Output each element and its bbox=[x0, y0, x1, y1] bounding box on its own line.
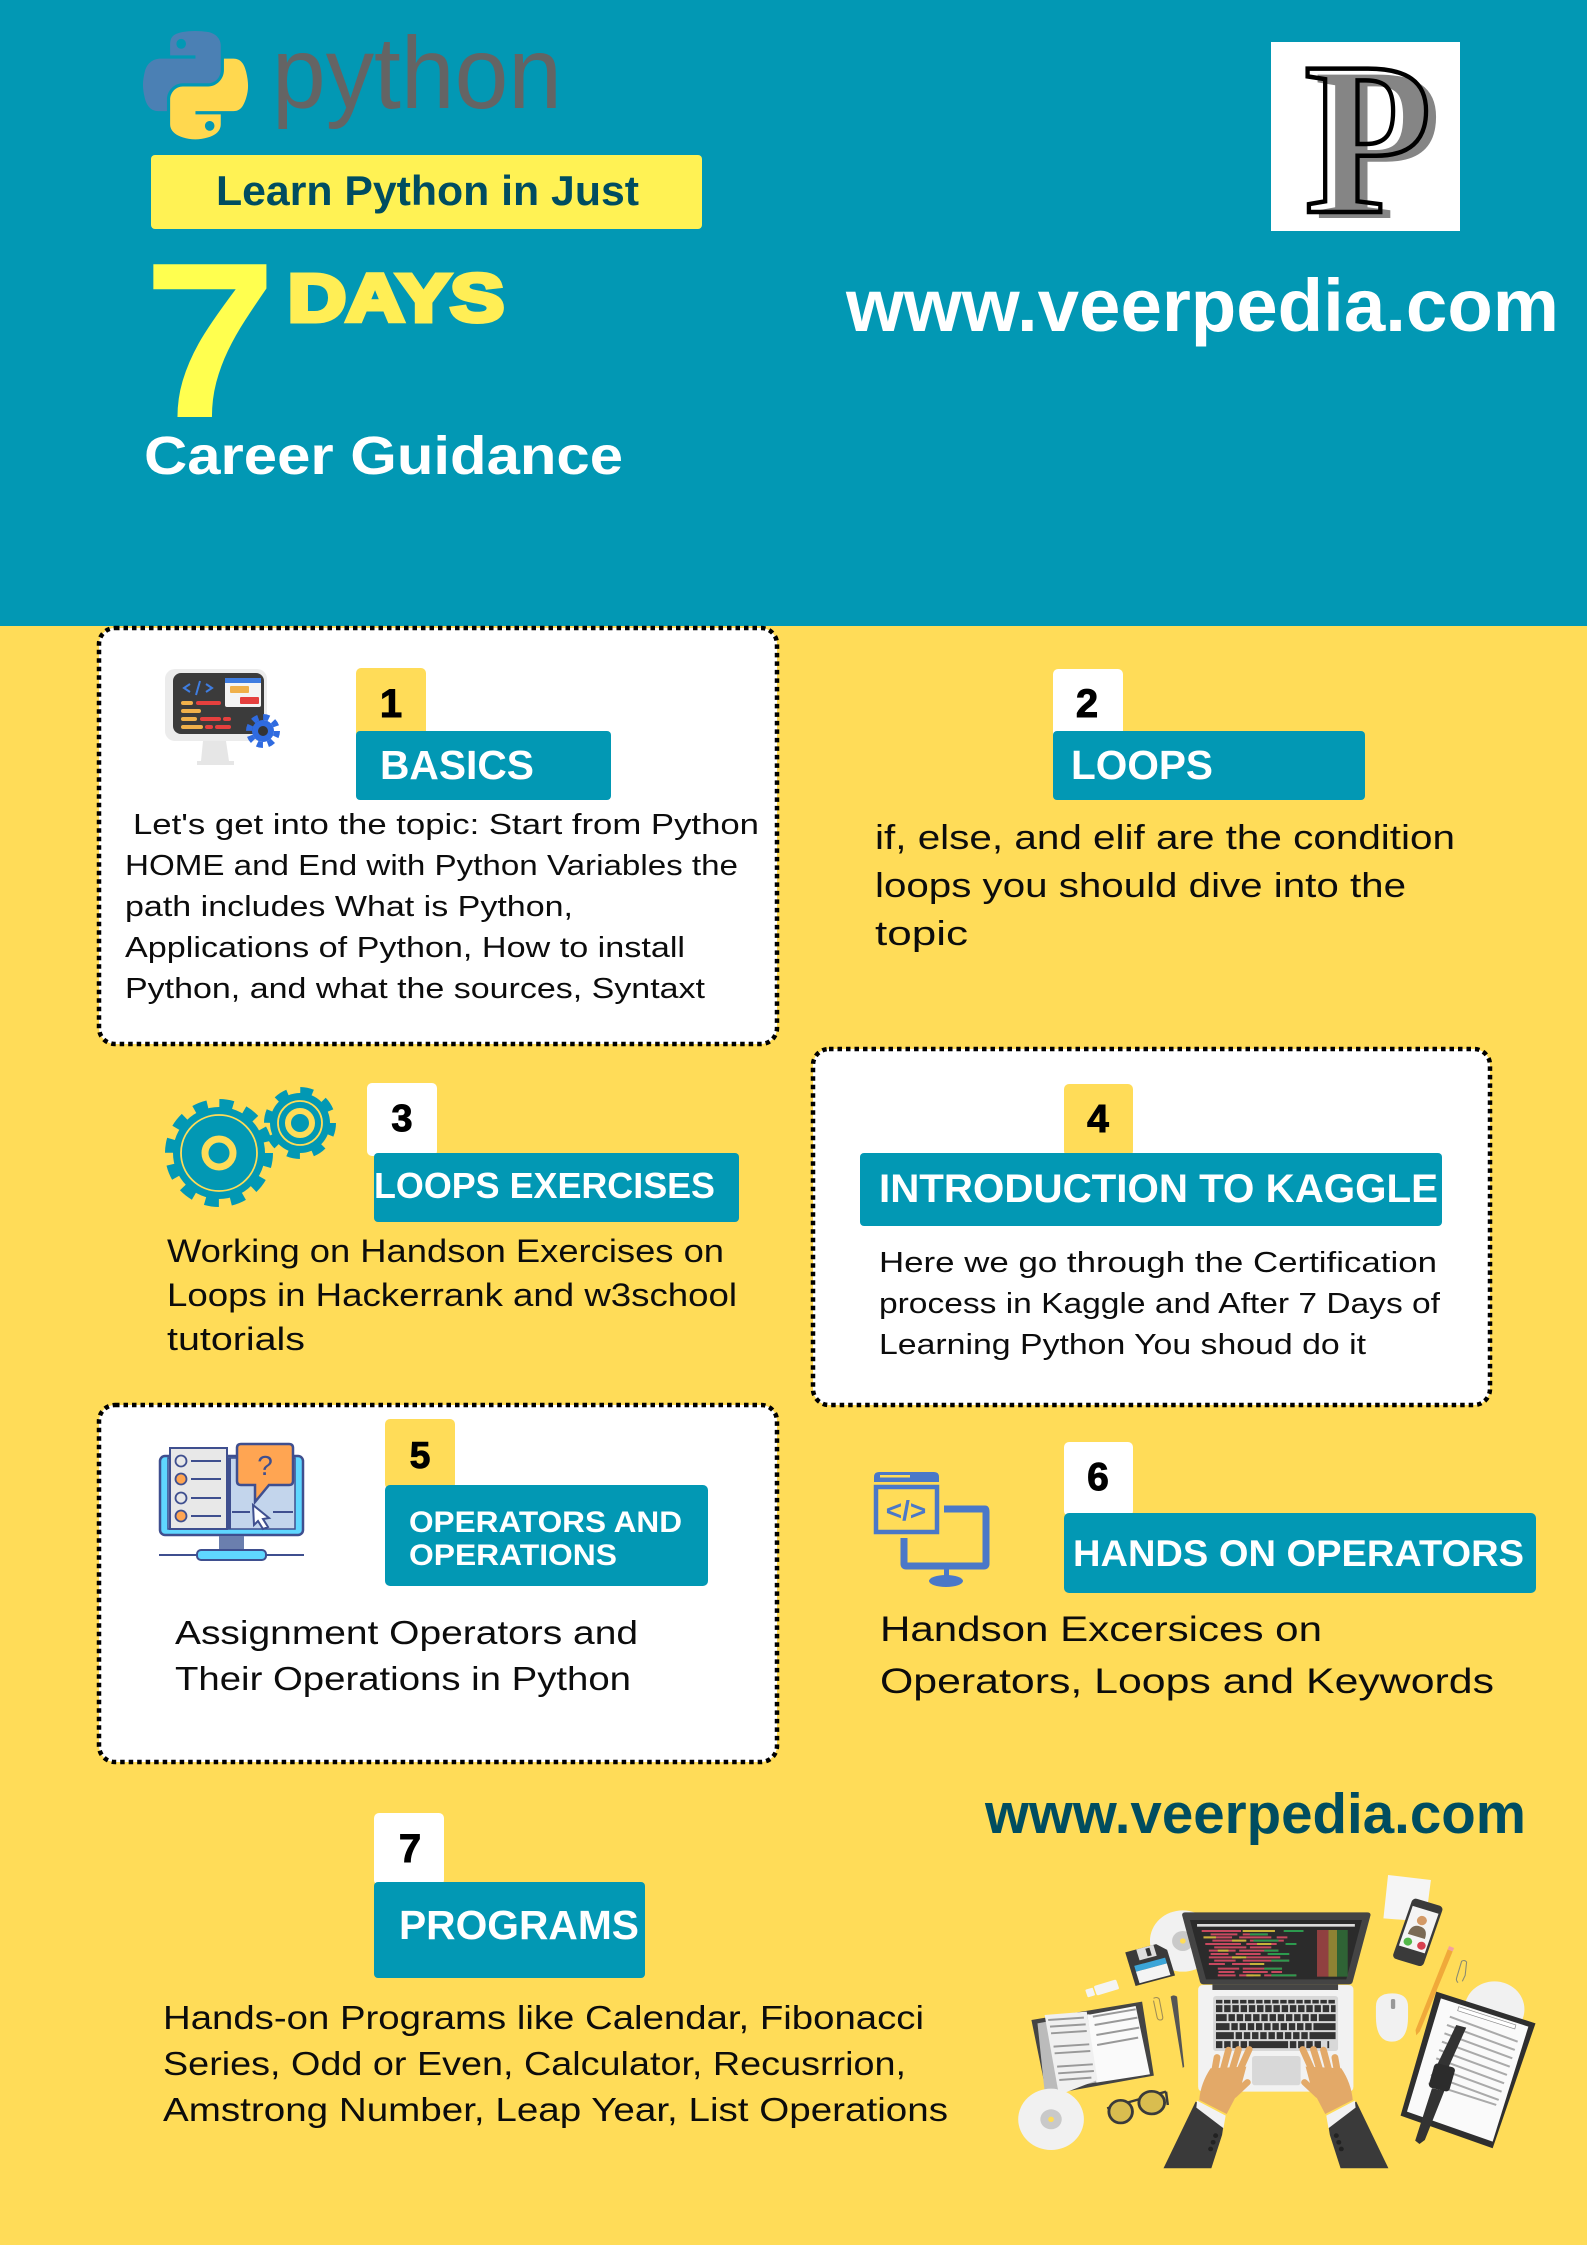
section: loops exercises bbox=[167, 1083, 739, 1357]
heading bar: programs bbox=[374, 1882, 645, 1978]
icon: code monitor bbox=[165, 669, 277, 765]
body text: kaggle: process in Kaggle and After 7 Days of bbox=[879, 1288, 1441, 1320]
header band bbox=[0, 0, 1587, 626]
footer website url: www.veerpedia.com bbox=[984, 1782, 1526, 1846]
icon: quiz monitor: ? bbox=[257, 1450, 273, 1481]
heading bar: operators and operations: OPERATORS AND bbox=[409, 1506, 682, 1539]
paperclip right bbox=[1456, 1960, 1467, 1983]
cd top bbox=[1150, 1910, 1216, 1972]
icon: python snakes bbox=[143, 31, 248, 139]
logo: veerpedia P bbox=[1271, 18, 1460, 266]
left hand and sleeve bbox=[1164, 2049, 1249, 2168]
heading bar: programs: PROGRAMS bbox=[399, 1902, 639, 1948]
number tile 3 bbox=[367, 1083, 437, 1156]
heading bar: hands on operators bbox=[1064, 1513, 1536, 1593]
number tile 7: 7 bbox=[399, 1827, 421, 1871]
heading bar: loops: LOOPS bbox=[1071, 742, 1213, 788]
usb stick bbox=[1085, 1979, 1119, 1998]
body text: basics: Let's get into the topic: Start from Python bbox=[133, 809, 759, 841]
icon: gears bbox=[171, 1092, 331, 1201]
body text: programs: Amstrong Number, Leap Year, List Operations bbox=[163, 2091, 948, 2128]
body text: loops exercises: Working on Handson Exercises on bbox=[167, 1233, 724, 1269]
body text: loops: if, else, and elif are the condition bbox=[875, 819, 1455, 857]
logo: veerpedia P: P bbox=[1304, 18, 1432, 260]
floppy disk bbox=[1125, 1942, 1175, 1986]
body text: kaggle: Learning Python You shoud do it bbox=[879, 1329, 1366, 1361]
open book bbox=[1031, 2002, 1154, 2095]
heading bar: basics: BASICS bbox=[380, 742, 534, 788]
career guidance heading: Career Guidance bbox=[144, 426, 623, 486]
banner: learn python bbox=[151, 155, 702, 229]
pencil bbox=[1416, 1946, 1454, 2035]
mouse bbox=[1376, 1993, 1408, 2042]
panel: basics bbox=[99, 628, 777, 1044]
section: programs bbox=[163, 1813, 948, 2128]
number tile 4 bbox=[1064, 1084, 1133, 1156]
clipboard with watch bbox=[1401, 1992, 1536, 2148]
notepad bbox=[1383, 1875, 1431, 1922]
number tile 4: 4 bbox=[1087, 1098, 1109, 1141]
right hand and sleeve bbox=[1303, 2049, 1388, 2168]
python logo bbox=[143, 16, 562, 139]
body text: kaggle bbox=[879, 1247, 1441, 1361]
number tile 1: 1 bbox=[380, 682, 402, 726]
number tile 2 bbox=[1053, 669, 1123, 739]
heading bar: loops bbox=[1053, 731, 1365, 800]
heading bar: kaggle: INTRODUCTION TO KAGGLE bbox=[879, 1167, 1438, 1211]
body text: kaggle: Here we go through the Certification bbox=[879, 1247, 1437, 1279]
body text: hands on operators: Handson Excersices on bbox=[880, 1610, 1322, 1649]
panel: operators and operations bbox=[99, 1405, 777, 1762]
body text: basics: Python, and what the sources, Syntaxt bbox=[125, 973, 705, 1005]
cd bottom bbox=[1018, 2089, 1084, 2150]
body text: basics bbox=[125, 809, 759, 1005]
body text: programs: Hands-on Programs like Calendar, Fibonacci bbox=[163, 1999, 924, 2036]
number tile 7 bbox=[374, 1813, 444, 1885]
laptop bbox=[1182, 1912, 1371, 2092]
heading bar: operators and operations: OPERATIONS bbox=[409, 1539, 617, 1572]
heading bar: basics bbox=[356, 731, 611, 800]
phone bbox=[1392, 1898, 1444, 1967]
icon: code window and monitor: </> bbox=[886, 1495, 926, 1526]
number tile 3: 3 bbox=[391, 1098, 413, 1140]
section: loops bbox=[875, 669, 1455, 953]
python wordmark: python bbox=[272, 16, 562, 130]
icon: quiz monitor bbox=[159, 1444, 304, 1560]
body text: basics: path includes What is Python, bbox=[125, 891, 573, 923]
heading bar: operators and operations bbox=[385, 1485, 708, 1586]
logo: veerpedia P: P bbox=[1314, 24, 1442, 266]
screen code lines bbox=[1202, 1931, 1303, 1975]
body text: operators: Assignment Operators and bbox=[175, 1614, 638, 1651]
body text: programs: Series, Odd or Even, Calculator, Recusrrion, bbox=[163, 2045, 906, 2082]
body text: hands on operators: Operators, Loops and Keywords bbox=[880, 1662, 1494, 1701]
icon: code window and monitor bbox=[874, 1472, 986, 1587]
body text: loops exercises: Loops in Hackerrank and w3school bbox=[167, 1277, 737, 1313]
number tile 6: 6 bbox=[1087, 1456, 1109, 1499]
cd right bbox=[1464, 1981, 1524, 2037]
heading bar: kaggle bbox=[860, 1153, 1442, 1226]
big number 7: 7 bbox=[143, 217, 277, 465]
body text: hands on operators bbox=[880, 1610, 1494, 1701]
heading bar: hands on operators: HANDS ON OPERATORS bbox=[1073, 1533, 1524, 1574]
number tile 5: 5 bbox=[410, 1435, 430, 1476]
number tile 6 bbox=[1064, 1442, 1133, 1516]
body text: programs bbox=[163, 1999, 948, 2128]
body text: loops exercises: tutorials bbox=[167, 1321, 305, 1357]
heading bar: loops exercises bbox=[374, 1153, 739, 1222]
glasses bbox=[1107, 2091, 1168, 2123]
body text: basics: Applications of Python, How to install bbox=[125, 932, 685, 964]
section: hands on operators bbox=[874, 1442, 1536, 1701]
illustration: developer desk bbox=[1018, 1875, 1536, 2168]
days heading: DAYS bbox=[288, 261, 504, 336]
body text: loops: topic bbox=[875, 915, 968, 953]
number tile 1 bbox=[356, 668, 426, 738]
heading bar: loops exercises: LOOPS EXERCISES bbox=[374, 1165, 715, 1206]
body text: loops bbox=[875, 819, 1455, 953]
body text: loops exercises bbox=[167, 1233, 737, 1357]
body text: operators: Their Operations in Python bbox=[175, 1660, 631, 1697]
number tile 5 bbox=[385, 1419, 455, 1489]
panel: introduction to kaggle bbox=[813, 1049, 1490, 1405]
pen bbox=[1171, 1995, 1184, 2068]
number tile 2: 2 bbox=[1076, 682, 1098, 726]
website url: www.veerpedia.com bbox=[845, 264, 1559, 347]
banner: learn python: Learn Python in Just bbox=[216, 167, 639, 214]
body text: basics: HOME and End with Python Variables the bbox=[125, 850, 738, 882]
keyboard bbox=[1213, 1996, 1338, 2051]
body text: loops: loops you should dive into the bbox=[875, 867, 1406, 905]
body text: operators bbox=[175, 1614, 638, 1697]
paperclip bbox=[1154, 1997, 1163, 2020]
